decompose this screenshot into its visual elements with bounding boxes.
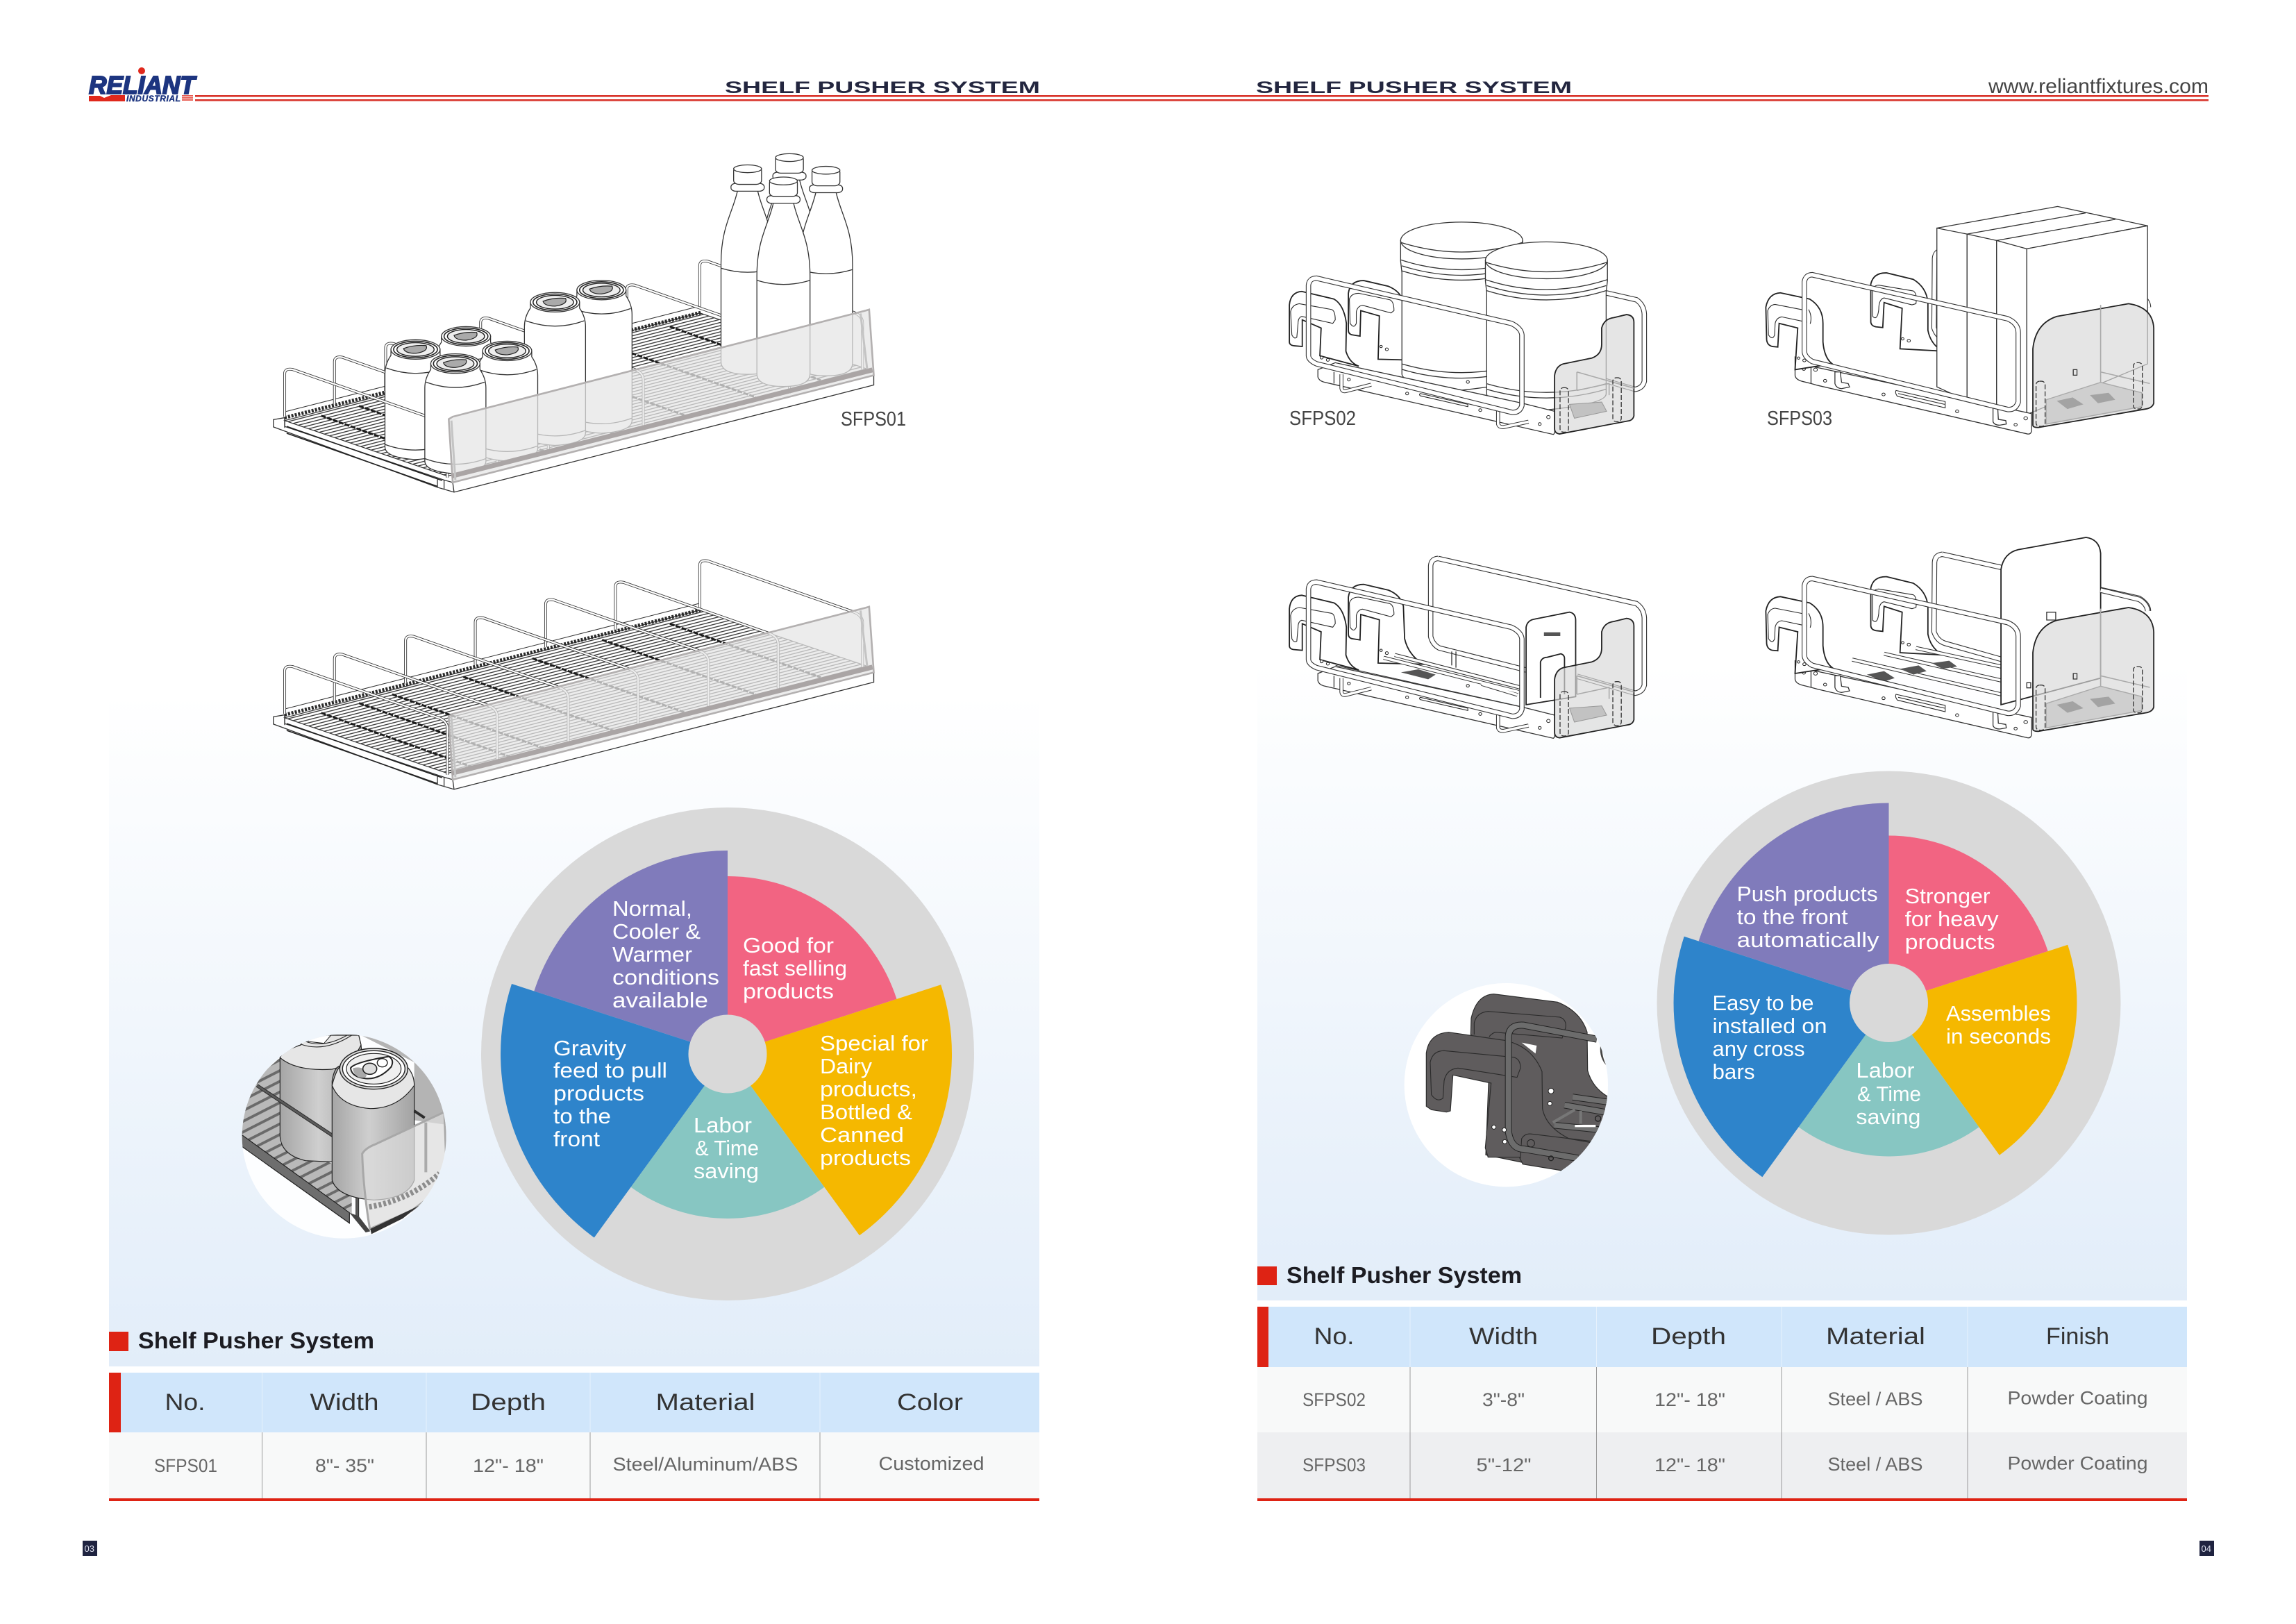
illustration: SFPS03 with boxes [1766, 206, 2154, 434]
spec table: SFPS01: Depth [471, 1389, 546, 1416]
sector: yellow dairy, bottled and canned: products [820, 1146, 911, 1170]
spec table: SFPS02 and SFPS03: Steel / ABS [1827, 1389, 1923, 1409]
spec table: SFPS02 and SFPS03: Powder Coating [2008, 1387, 2148, 1408]
sector: pink good for fast selling products: Good for [743, 933, 834, 957]
sector: yellow dairy, bottled and canned [728, 985, 952, 1235]
sector: pink good for fast selling products: products [743, 979, 834, 1003]
sector: blue easy install: installed on [1712, 1014, 1827, 1038]
sector: blue easy install: Easy to be [1712, 991, 1813, 1015]
illustration: SFPS02 empty [1289, 558, 1644, 738]
sector: yellow dairy, bottled and canned: products, [820, 1077, 917, 1101]
spec table: SFPS01: Material [655, 1389, 755, 1416]
page number 04: 04 [2201, 1543, 2211, 1554]
sector: purple conditions: available [612, 988, 708, 1012]
spec table: SFPS01: 8"- 35" [315, 1455, 374, 1476]
sector: purple conditions: Normal, [612, 896, 692, 921]
sector: purple conditions: conditions [612, 965, 719, 989]
heading: right page title: SHELF PUSHER SYSTEM [1256, 78, 1572, 97]
sector: yellow dairy, bottled and canned: Special for [820, 1031, 928, 1055]
sector: yellow assembles in seconds: in seconds [1946, 1024, 2051, 1048]
spec table: SFPS01: SFPS01 [154, 1455, 217, 1476]
wheel background disc [1657, 771, 2120, 1234]
spec table: SFPS01: No. [165, 1389, 206, 1416]
sector: pink stronger for heavy products [1888, 835, 2048, 1003]
sector: yellow assembles in seconds: Assembles [1946, 1001, 2051, 1026]
sector: yellow dairy, bottled and canned: Bottled & [820, 1100, 912, 1124]
sector: purple push products: Push products [1737, 882, 1878, 906]
spec table: SFPS01: Customized [879, 1453, 984, 1474]
product label: SFPS02: SFPS02 [1289, 408, 1356, 430]
spec table: SFPS02 and SFPS03: 12"- 18" [1654, 1455, 1725, 1475]
sector: teal labor and time saving: & Time [695, 1136, 759, 1160]
gradient panel: left page [109, 694, 1039, 1366]
sector: purple conditions: Warmer [612, 942, 692, 966]
wheel background disc [481, 807, 974, 1300]
sector: blue gravity feed: products [553, 1081, 644, 1105]
illustration: SFPS01 empty shelf [274, 560, 874, 789]
sector: teal labor and time saving [1799, 1003, 1979, 1157]
illustration: SFPS03 empty [1766, 537, 2154, 738]
spec table: SFPS02 and SFPS03 [1257, 1307, 2187, 1501]
sector: pink stronger for heavy products: for heavy [1905, 907, 1999, 931]
spec table: SFPS02 and SFPS03: 12"- 18" [1654, 1389, 1725, 1410]
wheel hub [689, 1015, 766, 1093]
spec table: SFPS02 and SFPS03: Powder Coating [2008, 1453, 2148, 1473]
sector: pink good for fast selling products: fast selling [743, 956, 847, 980]
page header [89, 67, 2209, 103]
sector: purple push products: automatically [1737, 928, 1879, 952]
sector: yellow assembles in seconds [1888, 945, 2077, 1155]
sector: blue gravity feed: Gravity [553, 1036, 627, 1060]
spec table: SFPS01: Steel/Aluminum/ABS [612, 1454, 798, 1475]
spec table: SFPS01: 12"- 18" [473, 1455, 544, 1476]
spec table: SFPS02 and SFPS03: 5"-12" [1476, 1455, 1532, 1475]
sector: purple conditions [534, 851, 728, 1054]
section heading: left table: Shelf Pusher System [138, 1328, 374, 1353]
section heading: right table: Shelf Pusher System [1287, 1262, 1522, 1288]
sector: blue gravity feed: feed to pull [553, 1058, 667, 1082]
sector: blue gravity feed: to the [553, 1104, 611, 1128]
logo: Reliant Industrial: INDUSTRIAL [126, 94, 181, 103]
spec table: SFPS02 and SFPS03: SFPS02 [1302, 1389, 1366, 1410]
sector: blue gravity feed: front [553, 1127, 600, 1151]
sector: teal labor and time saving: Labor [1856, 1058, 1914, 1082]
sector: teal labor and time saving: & Time [1857, 1082, 1921, 1106]
sector: teal labor and time saving: Labor [694, 1113, 752, 1137]
sector: blue easy install: any cross [1712, 1037, 1805, 1061]
spec table: SFPS02 and SFPS03: Steel / ABS [1827, 1454, 1923, 1475]
spec table: SFPS02 and SFPS03: Depth [1651, 1323, 1726, 1350]
spec table: SFPS01: Width [310, 1389, 379, 1416]
feature wheel: right page [1657, 771, 2120, 1234]
spec table: SFPS02 and SFPS03: SFPS03 [1302, 1455, 1366, 1475]
logo: Reliant Industrial: RELIANT [89, 71, 197, 99]
sector: teal labor and time saving [631, 1054, 824, 1219]
website address: www.reliantfixtures.com [1988, 75, 2209, 98]
callout: can detail circle [241, 1035, 446, 1239]
product label: SFPS01: SFPS01 [841, 408, 906, 430]
sector: purple conditions: Cooler & [612, 919, 701, 944]
sector: pink good for fast selling products [728, 876, 897, 1054]
header double rule [195, 95, 2209, 101]
sector: blue gravity feed [501, 984, 728, 1237]
page number 03: 03 [85, 1543, 94, 1554]
illustration: SFPS01 loaded shelf with cans and bottles [274, 153, 874, 492]
sector: pink stronger for heavy products: products [1905, 930, 1995, 954]
heading: left page title: SHELF PUSHER SYSTEM [725, 78, 1040, 97]
feature wheel: left page [481, 807, 974, 1300]
sector: teal labor and time saving: saving [694, 1159, 759, 1183]
spec table: SFPS02 and SFPS03: 3"-8" [1482, 1389, 1525, 1410]
spec table: SFPS01: Color [897, 1389, 963, 1416]
sector: purple push products [1699, 803, 1888, 1003]
sector: blue easy install [1674, 937, 1888, 1177]
page number 03 [83, 1541, 97, 1556]
sector: blue easy install: bars [1712, 1060, 1755, 1084]
illustration: SFPS02 with jars [1289, 222, 1644, 435]
sector: yellow dairy, bottled and canned: Canned [820, 1123, 904, 1147]
sector: purple push products: to the front [1737, 905, 1848, 929]
sector: yellow dairy, bottled and canned: Dairy [820, 1054, 873, 1078]
gradient panel: right page [1257, 663, 2187, 1300]
page number 04 [2199, 1541, 2214, 1556]
sector: teal labor and time saving: saving [1856, 1105, 1920, 1129]
product label: SFPS03: SFPS03 [1767, 408, 1832, 430]
spec table: SFPS02 and SFPS03: No. [1314, 1323, 1354, 1350]
sector: pink stronger for heavy products: Stronger [1905, 884, 1991, 908]
spec table: SFPS02 and SFPS03: Width [1469, 1323, 1538, 1350]
spec table: SFPS01 [109, 1373, 1039, 1501]
spec table: SFPS02 and SFPS03: Material [1826, 1323, 1925, 1350]
spec table: SFPS02 and SFPS03: Finish [2046, 1323, 2109, 1350]
wheel hub [1850, 964, 1928, 1042]
callout: bracket detail circle [1405, 983, 1609, 1187]
